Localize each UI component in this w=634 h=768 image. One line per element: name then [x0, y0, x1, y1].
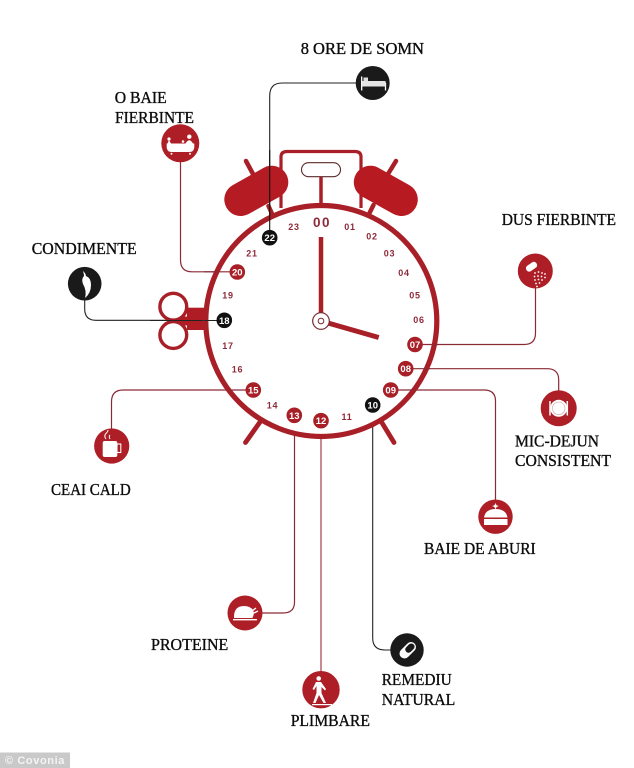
hour numbers: 21: [246, 248, 258, 258]
item: condimente: [32, 239, 137, 301]
label: DUS FIERBINTE: [502, 210, 616, 229]
hour numbers: 20: [232, 268, 243, 278]
item: mic-dejun consistent: [515, 390, 612, 470]
label line 2: NATURAL: [382, 690, 455, 709]
right bell: [368, 161, 401, 215]
icon: steam cloche: [478, 500, 513, 534]
item: dus fierbinte: [502, 210, 616, 288]
hour numbers: 14: [267, 400, 278, 410]
item: remediu natural: [382, 633, 455, 709]
label: REMEDIU: [382, 670, 452, 689]
label: 8 ORE DE SOMN: [301, 39, 424, 58]
hour numbers: 08: [400, 364, 411, 375]
hour numbers: 00: [313, 215, 331, 230]
item: baie de aburi: [424, 500, 536, 558]
hour numbers: 09: [385, 386, 396, 396]
icon: plate: [541, 390, 577, 426]
icon: bathtub: [161, 124, 199, 162]
winding key: [150, 293, 224, 348]
item: o baie fierbinte: [115, 88, 199, 162]
item: proteine: [151, 596, 262, 654]
hour numbers: 18: [219, 316, 230, 327]
connector lines: [85, 83, 559, 690]
icon: shower: [518, 254, 553, 288]
hour numbers: 04: [398, 268, 410, 278]
icon: roast chicken: [228, 596, 262, 630]
label: PLIMBARE: [291, 711, 370, 730]
hour numbers: 01: [344, 222, 356, 232]
label: BAIE DE ABURI: [424, 539, 536, 558]
hour numbers: 03: [384, 248, 395, 258]
hour numbers: 06: [413, 315, 425, 325]
item: plimbare: [291, 671, 370, 730]
item: 8 ore de somn: [301, 39, 424, 100]
label line 2: CONSISTENT: [515, 451, 612, 470]
watermark: Covonia: © Covonia: [5, 755, 65, 767]
clock hands: [313, 237, 379, 338]
hour numbers: 17: [222, 341, 234, 351]
label: O BAIE: [115, 88, 167, 107]
hour numbers: 11: [341, 412, 353, 422]
icon: pill: [390, 633, 424, 667]
label: CEAI CALD: [51, 480, 131, 499]
hour numbers: 05: [409, 290, 421, 300]
hour numbers: 15: [248, 386, 259, 396]
icon: walking person: [302, 671, 340, 708]
label line 2: FIERBINTE: [115, 108, 194, 127]
hour numbers: [216, 215, 425, 429]
hour numbers: 13: [289, 411, 300, 422]
hour numbers: 19: [222, 290, 234, 300]
icon: mug: [94, 428, 129, 464]
alarm clock: [150, 150, 438, 442]
hour numbers: 16: [232, 364, 243, 374]
icon: chili: [68, 267, 101, 301]
top handle: [281, 152, 361, 208]
feet: [246, 422, 394, 442]
label: CONDIMENTE: [32, 239, 137, 258]
watermark: Covonia: [0, 752, 70, 768]
icon: bed: [356, 66, 390, 100]
hour numbers: 23: [288, 222, 300, 232]
clock face: [206, 206, 437, 436]
label: MIC-DEJUN: [515, 431, 599, 450]
hour numbers: 10: [367, 400, 378, 412]
left bell: [241, 161, 273, 216]
hour numbers: 02: [366, 232, 378, 242]
hour numbers: 22: [264, 233, 275, 244]
re-drawn lines over face: [204, 150, 438, 390]
hour numbers: 12: [316, 416, 326, 427]
item: ceai cald: [51, 428, 131, 499]
hour numbers: 07: [410, 340, 420, 351]
label: PROTEINE: [151, 635, 228, 654]
